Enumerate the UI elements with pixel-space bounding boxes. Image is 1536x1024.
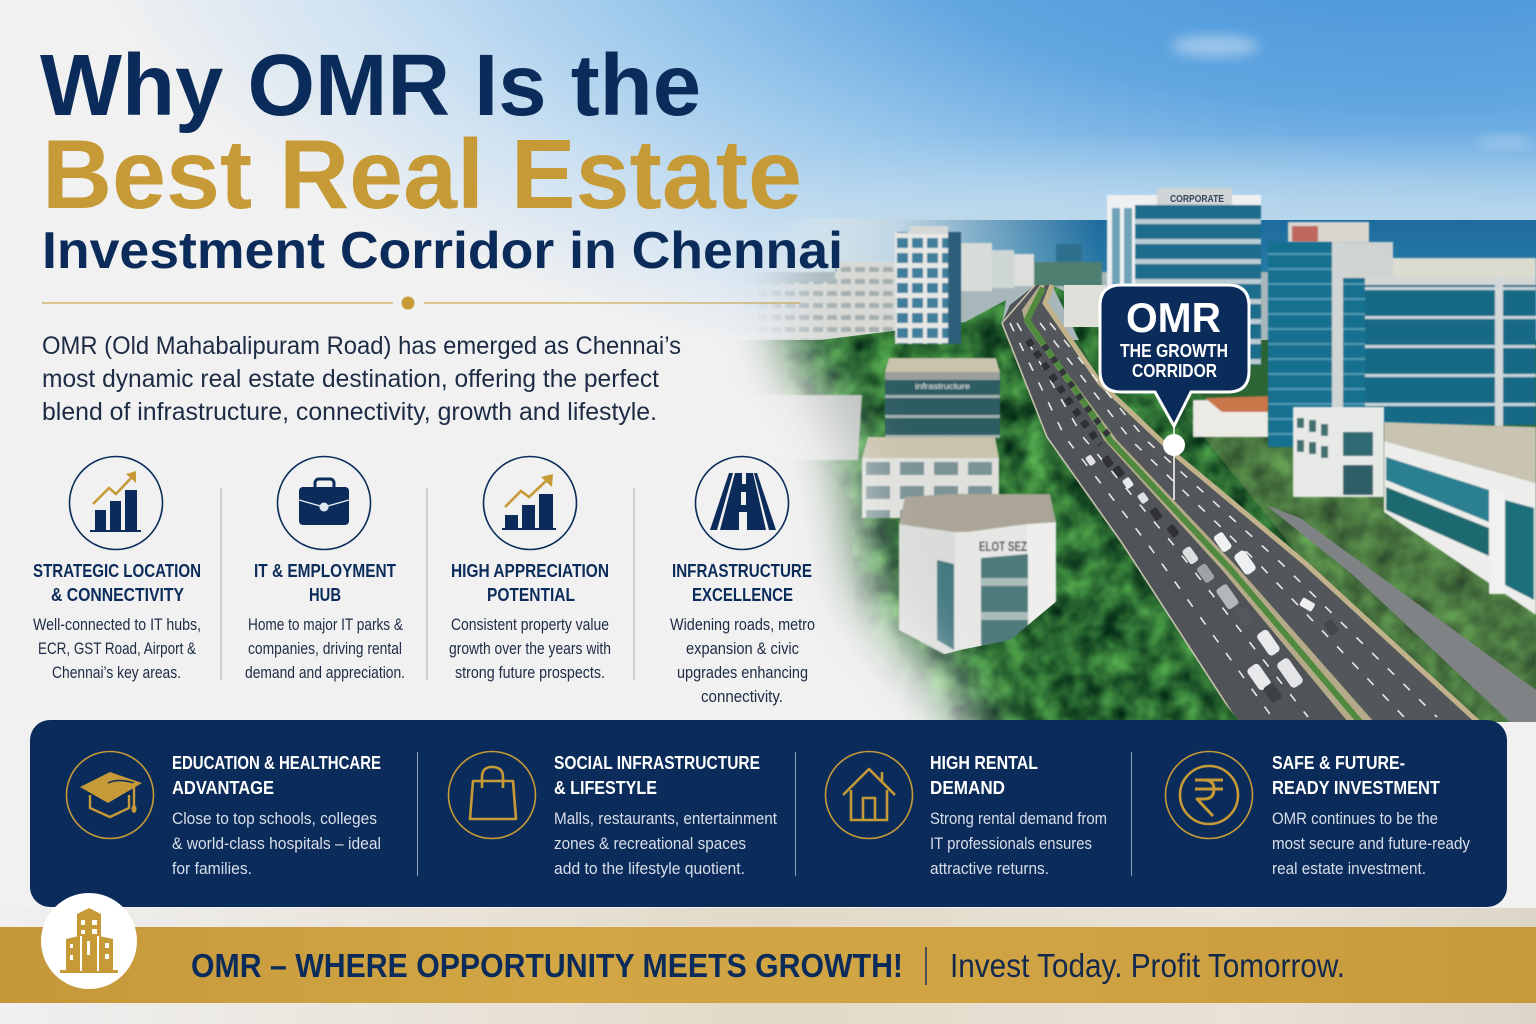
- vehicles: [1028, 340, 1340, 704]
- description: Well-connected to IT hubs,: [33, 615, 201, 634]
- description: demand and appreciation.: [245, 663, 405, 682]
- icon: shopping bag: [448, 752, 536, 838]
- benefit: safe and future ready: most secure and future-ready: [1272, 834, 1470, 853]
- benefit: safe and future ready: READY INVESTMENT: [1272, 778, 1440, 798]
- benefit: education and healthcare: for families.: [172, 859, 252, 878]
- benefit: high rental demand: attractive returns.: [930, 859, 1049, 878]
- description: [670, 615, 815, 706]
- description: connectivity.: [701, 687, 783, 706]
- heading: [672, 561, 812, 605]
- description: expansion & civic: [686, 639, 799, 658]
- faded low building: [771, 394, 863, 461]
- intro text: OMR (Old Mahabalipuram Road) has emerged as Chennai’s: [42, 332, 681, 360]
- description: [245, 615, 405, 682]
- description: Consistent property value: [451, 615, 609, 634]
- panel: infrastructure excellence: [670, 456, 815, 706]
- footer tagline: Invest Today. Profit Tomorrow.: [950, 947, 1345, 984]
- heading: & CONNECTIVITY: [51, 585, 184, 605]
- benefit: high rental demand: Strong rental demand from: [930, 809, 1107, 828]
- building sign: ELOT SEZ: [979, 538, 1027, 554]
- benefit: education and healthcare: EDUCATION & HEALTHCARE: [172, 753, 381, 773]
- icon: briefcase: [278, 456, 370, 550]
- callout: OMR the growth corridor: [1100, 285, 1249, 500]
- benefit: safe and future ready: [1166, 752, 1470, 878]
- foreground trees: [943, 601, 1238, 720]
- title line 2: Best Real Estate: [42, 119, 802, 229]
- description: Widening roads, metro: [670, 615, 815, 634]
- panel: IT and employment: [245, 456, 405, 682]
- benefit: high rental demand: [826, 752, 1107, 878]
- description: [449, 615, 611, 682]
- benefit: high rental demand: DEMAND: [930, 778, 1005, 798]
- panel: strategic location: [33, 456, 201, 682]
- benefit: education and healthcare: ADVANTAGE: [172, 778, 274, 798]
- building: mid-rise white: [862, 437, 999, 518]
- description: Home to major IT parks &: [248, 615, 404, 634]
- intro text: most dynamic real estate destination, offering the perfect: [42, 365, 659, 393]
- icon: growth bar chart: [70, 456, 162, 550]
- description: [33, 615, 201, 682]
- intro text: [42, 332, 681, 426]
- building: white front tower: [899, 494, 1056, 662]
- building: tall teal office tower: [1107, 188, 1261, 365]
- benefit: education and healthcare: [66, 752, 381, 878]
- title line 1: Why OMR Is the: [40, 37, 701, 134]
- panel: navy benefits panel: [30, 720, 1507, 907]
- highway: [1002, 285, 1478, 722]
- panel: high appreciation: [449, 456, 611, 682]
- description: growth over the years with: [449, 639, 611, 658]
- far tower: [895, 226, 961, 344]
- benefit: social infrastructure: zones & recreational spaces: [554, 834, 746, 853]
- building: orange-roof villa: [1193, 396, 1268, 437]
- benefit: social infrastructure: SOCIAL INFRASTRUCTURE: [554, 753, 760, 773]
- icon: road: [696, 456, 788, 550]
- benefit: education and healthcare: Close to top schools, colleges: [172, 809, 377, 828]
- footer logo: gold buildings: [41, 893, 137, 989]
- icon: appreciation chart: [484, 456, 576, 550]
- title line 3: Investment Corridor in Chennai: [42, 222, 843, 280]
- icon: graduation cap: [66, 752, 154, 838]
- benefit: social infrastructure: Malls, restaurants, entertainment: [554, 809, 777, 828]
- benefit: social infrastructure: add to the lifestyle quotient.: [554, 859, 745, 878]
- sea: [796, 218, 1536, 290]
- heading: STRATEGIC LOCATION: [33, 561, 201, 581]
- heading: INFRASTRUCTURE: [672, 561, 812, 581]
- heading: [254, 561, 396, 605]
- building: glass corner tower and curved block: [1268, 242, 1536, 447]
- benefit: safe and future ready: real estate investment.: [1272, 859, 1426, 878]
- building: lower right office: [1384, 422, 1536, 615]
- heading: [451, 561, 609, 605]
- benefit: high rental demand: IT professionals ensures: [930, 834, 1092, 853]
- icon: house: [826, 752, 912, 838]
- heading: IT & EMPLOYMENT: [254, 561, 396, 581]
- heading: HUB: [309, 585, 341, 605]
- building: rooftop sign block: [1288, 222, 1369, 243]
- heading: EXCELLENCE: [692, 585, 793, 605]
- sky: [0, 0, 1536, 440]
- benefit: high rental demand: HIGH RENTAL: [930, 753, 1038, 773]
- description: upgrades enhancing: [677, 663, 808, 682]
- footer slogan: OMR – WHERE OPPORTUNITY MEETS GROWTH!: [191, 947, 903, 984]
- description: Chennai’s key areas.: [52, 663, 181, 682]
- callout: OMR the growth corridor: CORRIDOR: [1132, 361, 1217, 381]
- service road right: [1266, 505, 1536, 722]
- callout: OMR the growth corridor: THE GROWTH: [1120, 341, 1228, 361]
- heading: [33, 561, 201, 605]
- title divider: [42, 296, 800, 310]
- tree canopy left of road: [780, 300, 1240, 722]
- ground base: [700, 340, 1536, 725]
- description: strong future prospects.: [455, 663, 605, 682]
- benefit: education and healthcare: & world-class hospitals – ideal: [172, 834, 381, 853]
- building: mid-rise dark glass: infrastructure: [915, 382, 971, 391]
- heading: HIGH APPRECIATION: [451, 561, 609, 581]
- rooftop sign text: CORPORATE: [1170, 194, 1224, 205]
- title: [40, 37, 843, 280]
- benefit: safe and future ready: SAFE & FUTURE-: [1272, 753, 1405, 773]
- heading: POTENTIAL: [487, 585, 575, 605]
- benefit: social infrastructure: & LIFESTYLE: [554, 778, 657, 798]
- benefit: safe and future ready: OMR continues to be the: [1272, 809, 1438, 828]
- description: ECR, GST Road, Airport &: [38, 639, 197, 658]
- planting right of road: [1052, 285, 1536, 722]
- benefit: social infrastructure: [448, 752, 777, 878]
- intro text: blend of infrastructure, connectivity, growth and lifestyle.: [42, 398, 657, 426]
- footer banner: [0, 927, 1536, 1003]
- callout: OMR the growth corridor: OMR: [1126, 294, 1221, 341]
- aerial city photo scene: [700, 188, 1536, 725]
- description: companies, driving rental: [248, 639, 402, 658]
- icon: rupee coin: [1166, 752, 1252, 838]
- building: mid-rise dark glass: [885, 358, 1000, 438]
- building: low white block: [1293, 407, 1384, 497]
- beige strip backgrounds: [0, 908, 1536, 1024]
- distant coast buildings: [758, 242, 1269, 340]
